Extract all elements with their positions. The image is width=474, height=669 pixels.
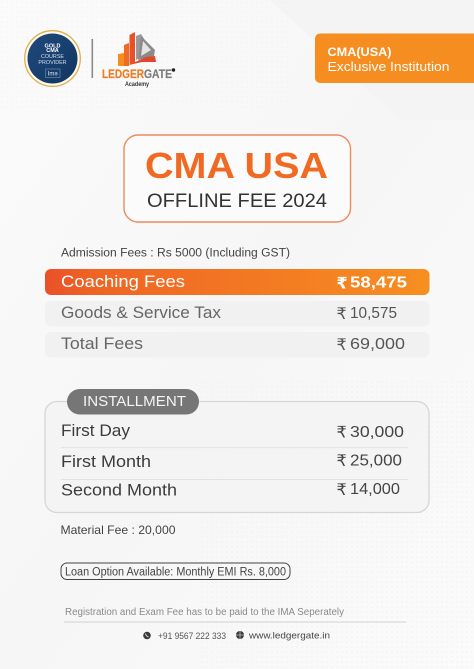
installment row: first day: First Day [61,422,131,440]
badge: CMA(USA) Exclusive Institution [315,34,474,83]
panel: installment [45,389,429,512]
installment heading pill [67,389,199,414]
logo divider [92,39,93,78]
installment row: second month: ₹ [336,482,347,499]
fee row: coaching fees: Coaching Fees [61,273,185,291]
installment row: second month: 14,000 [350,481,400,498]
loan option pill: Loan Option Available: Monthly EMI Rs. 8,000 [65,566,286,578]
fee row: total fees: 69,000 [350,336,405,353]
logo: IMA gold CMA course provider badge: GOLD [45,44,60,50]
title box [124,135,350,222]
installment row: first day [61,422,404,442]
fee row: total fees: Total Fees [61,335,143,353]
footer: phone: +91 9567 222 333 [158,631,226,642]
installment row: first month: ₹ [336,453,347,470]
registration note: Registration and Exam Fee has to be paid to the IMA Seperately [65,607,344,618]
fee row: coaching fees [45,269,430,295]
material fee note: Material Fee : 20,000 [60,523,176,537]
fee row: total fees: ₹ [336,337,347,354]
title box: CMA USA [145,145,328,186]
fee row: total fees [45,332,430,358]
fee row: goods and service tax: ₹ [336,306,347,323]
logo: Ledgergate Academy: LEDGER [102,67,144,81]
logo: Ledgergate Academy: GATE [144,67,172,81]
logo: IMA gold CMA course provider badge: Imə [48,72,58,78]
installment row: first month: First Month [61,453,151,471]
installment row: first day: ₹ [336,424,347,442]
loan option pill [61,563,290,580]
fee row: goods and service tax: Goods & Service Tax [61,304,222,322]
installment row: first month [61,452,402,471]
logo: IMA gold CMA course provider badge: PROVIDER [38,60,67,66]
logo: IMA gold CMA course provider badge [25,31,80,86]
title box: OFFLINE FEE 2024 [147,191,327,212]
logo: IMA gold CMA course provider badge: CMA [46,48,59,54]
installment row: second month: Second Month [61,482,177,500]
logo: Ledgergate Academy [102,32,175,88]
admission fees note: Admission Fees : Rs 5000 (Including GST) [61,248,290,260]
fee row: goods and service tax: 10,575 [350,305,397,322]
fee row: coaching fees: 58,475 [350,274,407,292]
installment row: second month [61,481,400,500]
fee row: coaching fees: ₹ [336,276,348,292]
logo: IMA gold CMA course provider badge: COURSE [41,54,64,60]
fee row: goods and service tax [45,301,430,326]
footer: website: www.ledgergate.in [248,630,330,642]
installment heading pill: INSTALLMENT [83,394,186,410]
badge: CMA(USA) Exclusive Institution: Exclusive Institution [328,60,450,74]
installment row: first month: 25,000 [350,452,402,470]
logo: Ledgergate Academy: Academy [125,81,149,88]
installment row: first day: 30,000 [350,424,404,441]
badge: CMA(USA) Exclusive Institution: CMA(USA) [328,45,392,59]
